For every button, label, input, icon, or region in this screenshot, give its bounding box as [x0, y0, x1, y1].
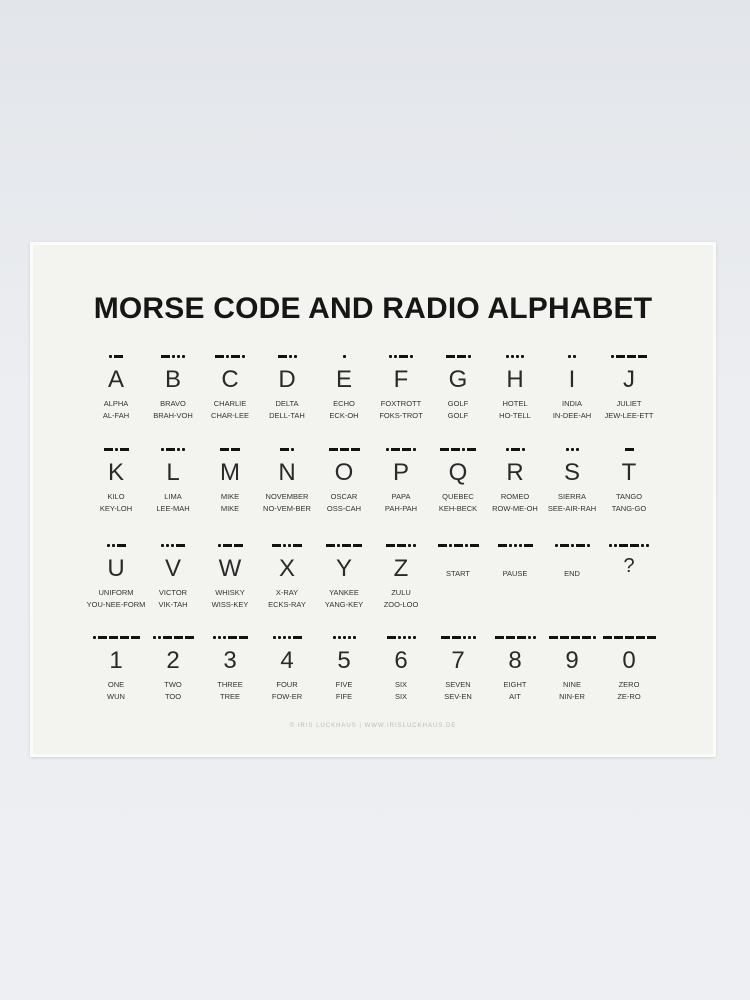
cell G: GOLF: [448, 399, 468, 408]
cell 5: 5: [337, 647, 351, 674]
cell question: [609, 544, 649, 577]
cell 6: SIX: [395, 680, 407, 689]
cell H: HOTEL: [502, 399, 528, 408]
cell O: [327, 448, 361, 513]
cell E: ECK-OH: [329, 411, 359, 420]
cell Y: [325, 544, 363, 609]
cell 9: [537, 632, 607, 703]
cell 3: THREE: [217, 680, 243, 689]
cell 1: [93, 636, 140, 701]
cell X: ECKS-RAY: [268, 600, 306, 609]
cell C: CHAR-LEE: [211, 411, 249, 420]
cell A: ALPHA: [104, 399, 128, 408]
cell O: OSS-CAH: [327, 504, 361, 513]
cell 0: [594, 632, 664, 703]
cell J: [604, 355, 654, 420]
cell F: FOKS-TROT: [379, 411, 423, 420]
cell P: [385, 448, 417, 513]
cell 7: [423, 632, 493, 703]
cell P: PAH-PAH: [385, 504, 417, 513]
cell 0: ZERO: [619, 680, 639, 689]
cell K: KEY-LOH: [100, 504, 132, 513]
cell P: PAPA: [392, 492, 410, 501]
cell K: KILO: [107, 492, 125, 501]
cell G: G: [449, 366, 467, 393]
cell E: ECHO: [333, 399, 355, 408]
cell X: X: [279, 555, 295, 582]
cell Q: Q: [449, 459, 467, 486]
cell 8: [480, 632, 550, 703]
row 1: [103, 355, 654, 420]
cell K: K: [108, 459, 124, 486]
cell 9: NINE: [563, 680, 581, 689]
cell W: WISS-KEY: [212, 600, 248, 609]
cell Q: KEH-BECK: [439, 504, 477, 513]
cell R: ROMEO: [501, 492, 529, 501]
cell O: OSCAR: [331, 492, 357, 501]
cell U: UNIFORM: [98, 588, 134, 597]
cell E: E: [336, 366, 352, 393]
cell F: [379, 355, 423, 420]
cell N: [263, 448, 311, 513]
cell I: INDIA: [562, 399, 582, 408]
cell J: JEW-LEE-ETT: [604, 411, 654, 420]
cell Z: ZULU: [391, 588, 411, 597]
cell M: MIKE: [221, 492, 239, 501]
cell M: MIKE: [221, 504, 239, 513]
cell END: END: [564, 569, 580, 578]
cell W: WHISKY: [215, 588, 245, 597]
cell P: P: [393, 459, 409, 486]
cell 4: [272, 636, 302, 701]
cell M: M: [220, 459, 240, 486]
cell F: F: [394, 366, 408, 393]
cell X: X-RAY: [276, 588, 298, 597]
cell 2: 2: [166, 647, 180, 674]
cell C: [211, 355, 249, 420]
cell G: [446, 355, 471, 420]
cell 5: FIFE: [336, 692, 352, 701]
cell I: I: [569, 366, 575, 393]
cell H: H: [506, 366, 524, 393]
cell 6: 6: [394, 647, 408, 674]
cell 9: 9: [565, 647, 579, 674]
cell B: [153, 355, 193, 420]
cell END: [555, 544, 590, 578]
cell N: N: [278, 459, 296, 486]
cell S: [548, 448, 596, 513]
cell Z: Z: [394, 555, 408, 582]
cell Y: Y: [336, 555, 352, 582]
cell 3: 3: [223, 647, 237, 674]
cell O: O: [335, 459, 353, 486]
cell D: [269, 355, 305, 420]
cell V: [158, 544, 188, 609]
cell Z: ZOO-LOO: [384, 600, 418, 609]
cell 1: 1: [109, 647, 123, 674]
cell 8: 8: [508, 647, 522, 674]
cell 5: FIVE: [336, 680, 352, 689]
cell B: BRAH-VOH: [153, 411, 193, 420]
row 3: [86, 544, 649, 609]
cell X: [268, 544, 306, 609]
cell W: W: [219, 555, 241, 582]
cell N: NO-VEM-BER: [263, 504, 311, 513]
cell G: GOLF: [448, 411, 468, 420]
cell M: [220, 448, 240, 513]
cell K: [100, 448, 132, 513]
cell R: R: [506, 459, 524, 486]
cell S: SEE-AIR-RAH: [548, 504, 596, 513]
cell S: SIERRA: [558, 492, 586, 501]
cell 4: 4: [280, 647, 294, 674]
cell R: [492, 448, 538, 513]
cell C: C: [221, 366, 239, 393]
cell I: [553, 355, 591, 420]
cell 4: FOUR: [276, 680, 298, 689]
cell 8: AIT: [509, 692, 521, 701]
cell D: DELL-TAH: [269, 411, 305, 420]
cell N: NOVEMBER: [266, 492, 308, 501]
cell C: CHARLIE: [214, 399, 246, 408]
cell A: AL-FAH: [103, 411, 129, 420]
cell U: [86, 544, 145, 609]
cell V: V: [165, 555, 181, 582]
cell PAUSE: PAUSE: [503, 569, 527, 578]
cell Q: QUEBEC: [442, 492, 474, 501]
cell 5: [333, 636, 356, 701]
cell B: BRAVO: [160, 399, 186, 408]
cell B: B: [165, 366, 181, 393]
cell 7: SEV-EN: [444, 692, 472, 701]
footer credit: © IRIS LUCKHAUS | WWW.IRISLUCKHAUS.DE: [290, 723, 456, 729]
cell 2: TWO: [164, 680, 182, 689]
cell 9: NIN-ER: [559, 692, 585, 701]
cell J: J: [623, 366, 635, 393]
cell L: LIMA: [164, 492, 182, 501]
cell 8: EIGHT: [504, 680, 526, 689]
cell H: HO-TELL: [499, 411, 531, 420]
cell 7: 7: [451, 647, 465, 674]
cell START: START: [446, 569, 470, 578]
cell V: VICTOR: [159, 588, 187, 597]
cell question: ?: [623, 555, 635, 577]
cell 7: SEVEN: [445, 680, 471, 689]
poster: [30, 242, 716, 757]
cell 6: [387, 636, 416, 701]
row 4: [93, 636, 656, 701]
cell 6: SIX: [395, 692, 407, 701]
cell V: VIK-TAH: [158, 600, 188, 609]
cell START: [438, 544, 479, 578]
cell L: LEE-MAH: [156, 504, 190, 513]
cell T: TANGO: [616, 492, 642, 501]
cell S: S: [564, 459, 580, 486]
cell 3: [213, 636, 248, 701]
cell 4: FOW-ER: [272, 692, 302, 701]
cell L: L: [166, 459, 180, 486]
cell T: TANG-GO: [612, 504, 646, 513]
cell W: [212, 544, 248, 609]
cell H: [499, 355, 531, 420]
cell PAUSE: [498, 544, 533, 578]
cell Q: [439, 448, 477, 513]
cell U: U: [107, 555, 125, 582]
cell U: YOU-NEE-FORM: [87, 600, 145, 609]
cell 2: TOO: [165, 692, 181, 701]
cell Z: [384, 544, 418, 609]
cell A: A: [108, 366, 124, 393]
cell I: IN-DEE-AH: [553, 411, 591, 420]
cell 1: WUN: [107, 692, 125, 701]
cell 0: ZE-RO: [617, 692, 641, 701]
cell D: DELTA: [275, 399, 299, 408]
cell D: D: [278, 366, 296, 393]
cell A: [103, 355, 129, 420]
row 2: [100, 448, 646, 513]
cell 1: ONE: [108, 680, 124, 689]
cell E: [329, 355, 359, 420]
cell T: [612, 448, 646, 513]
title: MORSE CODE AND RADIO ALPHABET: [94, 292, 652, 325]
cell 2: [153, 636, 194, 701]
cell Y: YANKEE: [329, 588, 359, 597]
cell 3: TREE: [220, 692, 240, 701]
cell 0: 0: [622, 647, 636, 674]
cell Y: YANG-KEY: [325, 600, 363, 609]
cell J: JULIET: [616, 399, 642, 408]
cell F: FOXTROTT: [381, 399, 421, 408]
cell T: T: [622, 459, 636, 486]
cell L: [156, 448, 190, 513]
cell R: ROW-ME-OH: [492, 504, 538, 513]
